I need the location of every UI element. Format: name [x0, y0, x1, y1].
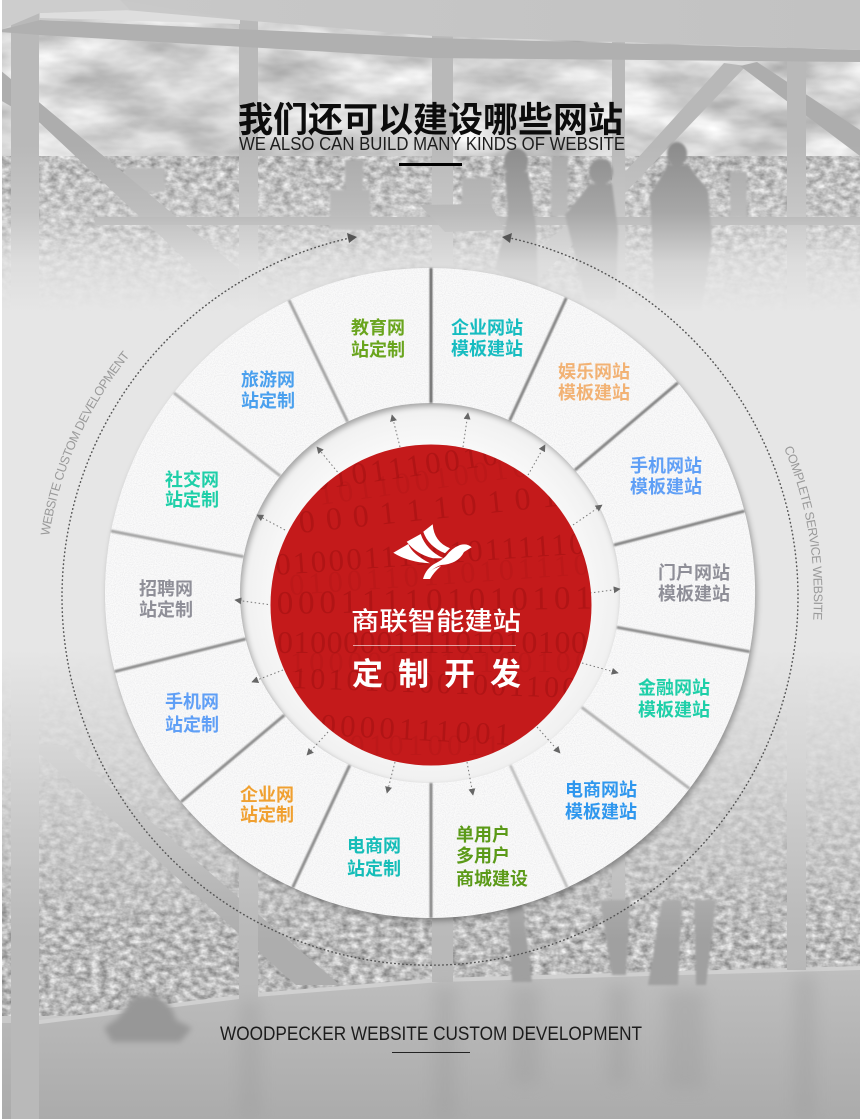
segment: ecommerce template: 模板建站: [565, 802, 637, 822]
binary digits texture: 1000011110100100: [290, 646, 590, 679]
brand name: 商联智能建站: [351, 608, 521, 636]
city skyline: [0, 156, 860, 1016]
segment: mall building: [430, 765, 567, 918]
segment: entertainment template: 模板建站: [558, 383, 630, 403]
segment: entertainment template: [510, 298, 678, 470]
segment: social custom: 站定制: [165, 489, 219, 510]
custom development heading: 定制开发: [352, 657, 521, 692]
segment: mall building: 商城建设: [456, 868, 528, 889]
binary digits texture: 0 0 0 1 1 1 1 0 1 0 1 0 1 0 1: [277, 581, 592, 622]
red core circle: [270, 434, 592, 766]
distant towers: [125, 156, 747, 230]
roof beam: [0, 20, 860, 62]
binary digits texture: 010001111010111110: [274, 525, 586, 582]
sky with clouds: [0, 20, 860, 160]
segment: enterprise custom: 站定制: [240, 804, 294, 825]
segment: enterprise template: 模板建站: [451, 339, 523, 359]
segment: enterprise template: [430, 268, 566, 420]
binary digits texture: 1010101001001100: [292, 662, 578, 705]
binary digits texture: 101010011: [330, 729, 500, 762]
segment: ecommerce custom: [293, 765, 430, 918]
rail: [95, 217, 860, 225]
binary digits texture: 0100110110101110: [288, 548, 590, 602]
segment: mobile template: [575, 383, 744, 545]
arrow head right: [502, 233, 512, 243]
dashed arrows from core to segments: [235, 413, 620, 795]
segment: finance template: 模板建站: [638, 700, 710, 720]
segment: social custom: [111, 393, 280, 557]
segment: ecommerce custom: 站定制: [347, 858, 401, 879]
segment: travel custom: [174, 300, 348, 476]
binary digits texture: 101100100100: [316, 447, 549, 512]
wheel of fourteen website types: [105, 268, 755, 918]
curved caption right: COMPLETE SERVICE WEBSITE: [785, 446, 823, 620]
segment: finance template: [582, 627, 750, 789]
segment: portal template: 门户网站: [658, 562, 730, 583]
curved caption left: WEBSITE CUSTOM DEVELOPMENT: [40, 350, 128, 534]
segment: mobile custom: 站定制: [165, 714, 219, 735]
segment: recruitment custom: 站定制: [139, 599, 193, 620]
binary digits texture: 01011100100: [311, 434, 519, 497]
inner ring disc: [238, 402, 622, 786]
segment: education custom: 教育网: [351, 317, 405, 338]
ceiling: [120, 0, 860, 50]
segment: social custom: 社交网: [165, 469, 219, 490]
title underline: [399, 163, 462, 166]
segment: portal template: 模板建站: [658, 584, 730, 604]
bird logo: [393, 524, 472, 579]
segment: mall building: 多用户: [456, 845, 510, 866]
binary digits texture: 0100000111101010100: [277, 624, 587, 660]
segment: portal template: [614, 511, 755, 652]
segment: ecommerce template: [510, 707, 690, 888]
segment: mobile custom: [115, 639, 284, 802]
segment: finance template: 金融网站: [638, 677, 710, 698]
segment: mobile custom: 手机网: [165, 692, 219, 712]
segment: education custom: 站定制: [351, 339, 405, 360]
segment: travel custom: 旅游网: [241, 369, 295, 390]
segment: enterprise custom: [181, 715, 350, 888]
binary digits texture: 0 0 0 1 1 1 0 1 0 1: [297, 477, 559, 540]
segment: mobile template: 模板建站: [630, 477, 702, 497]
dotted outer ring: [62, 238, 798, 965]
footer caption: WOODPECKER WEBSITE CUSTOM DEVELOPMENT: [220, 1024, 642, 1045]
binary digits texture: [274, 434, 592, 762]
binary digits texture: 0000111001: [320, 707, 511, 752]
subtitle: WE ALSO CAN BUILD MANY KINDS OF WEBSITE: [239, 134, 625, 154]
segment: mall building: 单用户: [456, 824, 510, 845]
lectern: [420, 204, 505, 232]
footer underline: [392, 1052, 470, 1053]
arrow head left: [347, 233, 357, 243]
backpack on the floor: [104, 994, 192, 1042]
segment: recruitment custom: [105, 531, 246, 672]
segment: ecommerce template: 电商网站: [565, 780, 637, 800]
title: 我们还可以建设哪些网站: [238, 101, 623, 140]
segment: travel custom: 站定制: [241, 390, 295, 411]
floor reflections: [240, 975, 815, 1119]
floor: [0, 968, 860, 1119]
segment: enterprise template: 企业网站: [451, 317, 523, 338]
segment dividers: [111, 268, 750, 918]
segment: enterprise custom: 企业网: [240, 784, 294, 805]
people silhouettes: [495, 142, 716, 985]
segment: education custom: [289, 268, 430, 422]
segment: ecommerce custom: 电商网: [347, 836, 401, 856]
segment: recruitment custom: 招聘网: [139, 579, 193, 599]
segment: entertainment template: 娱乐网站: [558, 362, 630, 382]
segment: mobile template: 手机网站: [630, 456, 702, 476]
